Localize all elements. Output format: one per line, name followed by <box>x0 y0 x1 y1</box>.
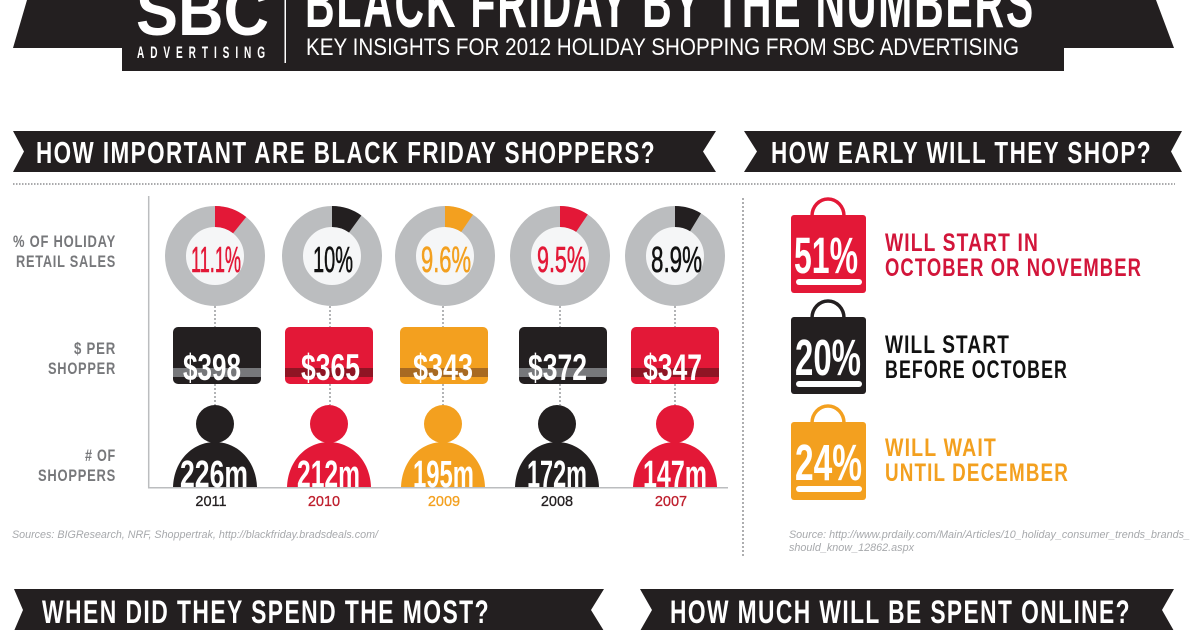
card 2010: $365 <box>285 327 373 388</box>
text: will start in October or November: WILL START IN <box>885 229 1039 257</box>
section heading: how important <box>13 131 716 172</box>
shopper 2008: 172m: 172m <box>527 454 587 496</box>
year labels: 2007 <box>655 494 687 510</box>
year labels: 2009 <box>428 494 460 510</box>
year labels: 2011 <box>195 494 227 510</box>
shopper 2011: 226m <box>173 405 257 496</box>
bag: 20% <box>791 301 866 394</box>
section heading: how important: HOW IMPORTANT ARE BLACK FRIDAY SHOPPERS? <box>36 135 656 170</box>
shopper 2007: 147m <box>633 405 717 496</box>
sources: right panel <box>789 529 1190 554</box>
donut 2010: 10% <box>292 206 372 296</box>
shopper 2007: 147m: 147m <box>643 454 707 496</box>
donut 2011: 11.1%: 11.1% <box>191 239 241 280</box>
donut 2010: 10%: 10% <box>313 239 353 280</box>
row labels: $ PER <box>74 339 116 358</box>
donut 2007: 8.9%: 8.9% <box>651 239 702 280</box>
card 2011: $398 <box>173 327 261 388</box>
chart axes <box>149 196 728 488</box>
shopper 2010: 212m <box>287 405 371 496</box>
text: will wait until December <box>885 434 1069 487</box>
logo: SBC Advertising: ADVERTISING <box>137 43 271 62</box>
year labels: 2008 <box>541 494 573 510</box>
year labels <box>195 494 687 510</box>
text: will start before October <box>885 331 1068 384</box>
shopper 2009: 195m <box>401 405 485 496</box>
card 2010: $365: $365 <box>301 347 360 388</box>
card 2009: $343 <box>400 327 488 388</box>
section heading: when did they spend: WHEN DID THEY SPEND THE MOST? <box>42 594 490 630</box>
row labels: % OF HOLIDAY <box>13 232 116 251</box>
text: will wait until December: WILL WAIT <box>885 434 997 462</box>
donut 2009: 9.6% <box>406 206 484 296</box>
sources: right panel: should_know_12862.aspx <box>789 542 914 554</box>
row labels: RETAIL SALES <box>16 252 116 271</box>
shopper 2011: 226m: 226m <box>180 454 248 496</box>
bag: 24% <box>791 406 866 500</box>
sources: left panel: Sources: BIGResearch, NRF, Shoppertrak, http://blackfriday.bradsdeals.com/ <box>12 529 379 541</box>
shopper 2008: 172m <box>515 405 599 496</box>
card 2008: $372: $372 <box>528 347 587 388</box>
donut 2009: 9.6%: 9.6% <box>421 239 471 280</box>
donut 2011: 11.1% <box>176 206 254 296</box>
bag: 20%: 20% <box>795 329 861 386</box>
card 2008: $372 <box>519 327 607 388</box>
row labels: # OF <box>85 446 116 465</box>
text: will start before October: BEFORE OCTOBER <box>885 356 1068 384</box>
bag: 51%: 51% <box>794 227 858 284</box>
text: will wait until December: UNTIL DECEMBER <box>885 459 1069 487</box>
card 2009: $343: $343 <box>413 347 473 388</box>
card 2011: $398: $398 <box>183 347 241 388</box>
header banner <box>13 0 1174 71</box>
year labels: 2010 <box>308 494 340 510</box>
card 2007: $347 <box>631 327 719 388</box>
donut 2007: 8.9% <box>636 206 714 296</box>
sources: right panel: Source: http://www.prdaily.com/Main/Articles/10_holiday_consumer_trends_brands_ <box>789 529 1190 541</box>
donut 2008: 9.5% <box>520 206 600 296</box>
shopper 2010: 212m: 212m <box>297 454 360 496</box>
row labels: SHOPPERS <box>38 466 116 485</box>
text: will start in October or November <box>885 229 1142 282</box>
text: will start before October: WILL START <box>885 331 1010 359</box>
row labels: SHOPPER <box>48 359 116 378</box>
subtitle: KEY INSIGHTS FOR 2012 HOLIDAY SHOPPING FROM SBC ADVERTISING <box>306 34 1019 61</box>
row labels <box>13 232 116 485</box>
bag: 24%: 24% <box>795 434 862 491</box>
shopper 2009: 195m: 195m <box>413 454 474 496</box>
bag: 51% <box>791 199 866 293</box>
card 2007: $347: $347 <box>643 347 702 388</box>
donut 2008: 9.5%: 9.5% <box>537 239 586 280</box>
